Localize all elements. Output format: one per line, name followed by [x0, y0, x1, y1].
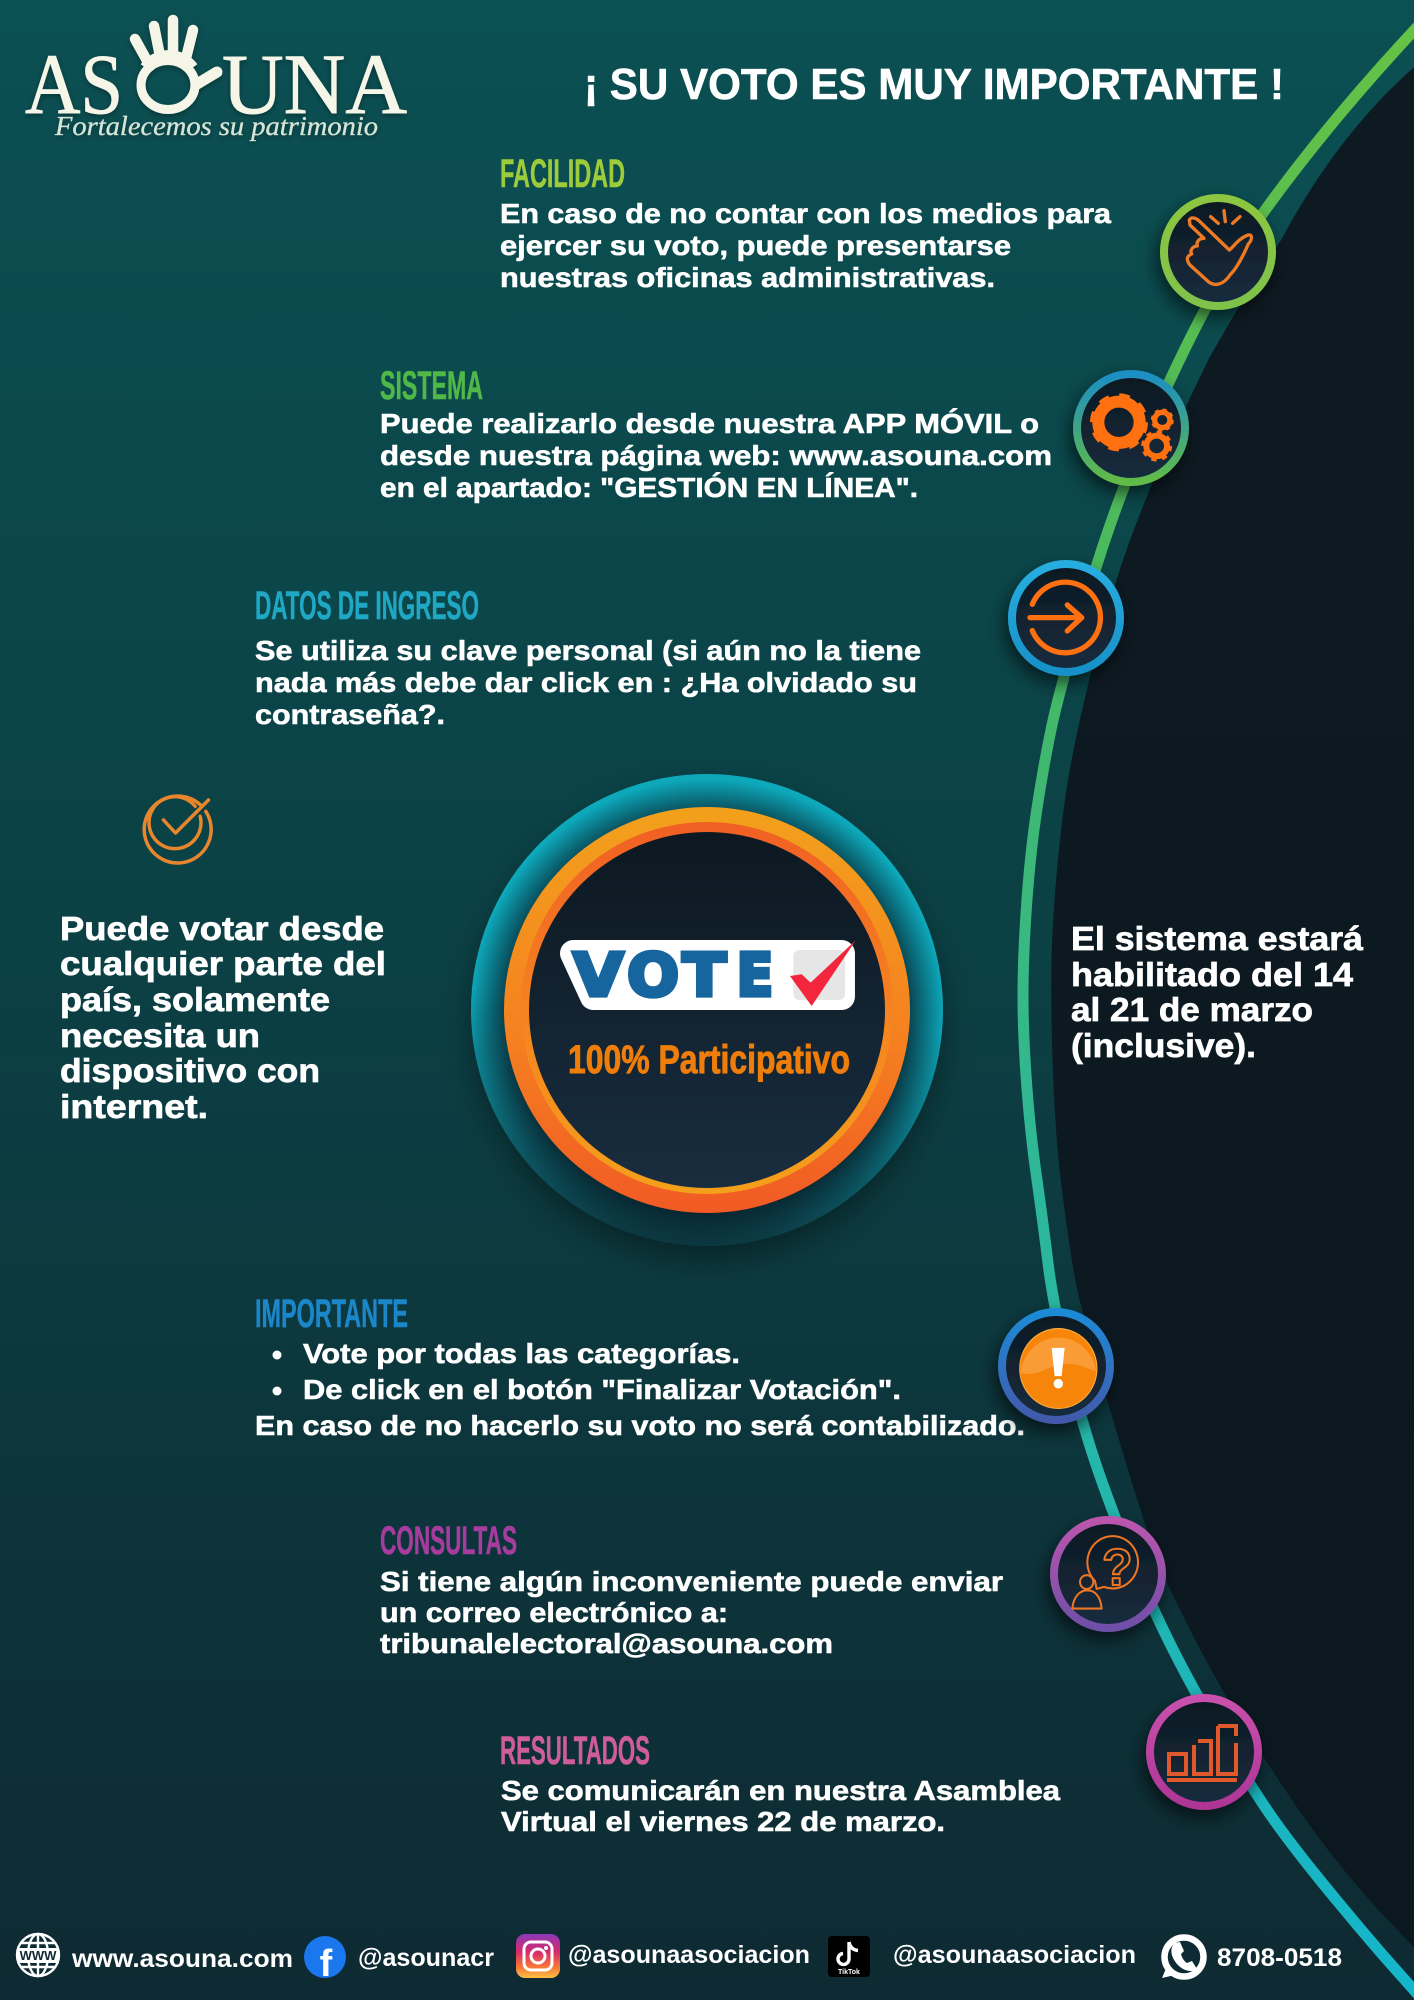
vote logo: E [737, 941, 773, 1009]
footer: contact bar: @asounaasociacion [893, 1941, 1136, 1969]
text block: importante: De click en el botón "Finalizar Votación". [303, 1374, 901, 1405]
logo: ASOUNA: UNA [222, 36, 407, 132]
text block: votar desde cualquier parte: Puede votar desde [60, 910, 384, 947]
vote logo: V [573, 941, 624, 1009]
text block: fechas del sistema: al 21 de marzo [1071, 991, 1313, 1028]
text block: facilidad: ejercer su voto, puede presentarse [500, 230, 1011, 261]
text block: importante: IMPORTANTE [255, 1292, 408, 1336]
vote logo: O [627, 941, 679, 1009]
text block: datos de ingreso: nada más debe dar click en : ¿Ha olvidado su [255, 667, 917, 698]
badge subtitle: 100% Participativo [568, 1038, 850, 1082]
text block: facilidad: nuestras oficinas administrativas. [500, 262, 995, 293]
logo: ASOUNA: Fortalecemos su patrimonio [54, 111, 378, 141]
text block: resultados: RESULTADOS [500, 1729, 650, 1773]
text block: consultas: un correo electrónico a: [380, 1597, 728, 1628]
icon: web globe: WWW [20, 1948, 57, 1963]
text block: votar desde cualquier parte: internet. [60, 1088, 208, 1125]
icon: facebook [304, 1936, 346, 1985]
vote logo: T [683, 941, 726, 1009]
text block: votar desde cualquier parte: dispositivo con [60, 1052, 320, 1089]
central vote badge [467, 774, 947, 1256]
icon: bar chart [1150, 1698, 1258, 1806]
icon: question person: ? [1102, 1538, 1133, 1596]
text block: datos de ingreso [255, 584, 921, 730]
text block: datos de ingreso: Se utiliza su clave personal (si aún no la tiene [255, 635, 921, 666]
icon: facebook: f [320, 1943, 333, 1985]
text block: votar desde cualquier parte: cualquier parte del [60, 945, 386, 982]
text block: sistema: desde nuestra página web: www.asouna.com [380, 440, 1052, 471]
text block: resultados: Virtual el viernes 22 de marzo. [501, 1806, 945, 1837]
icon: gears [1077, 374, 1185, 482]
text block: votar desde cualquier parte: necesita un [60, 1017, 260, 1054]
text block: sistema: SISTEMA [380, 364, 483, 408]
text block: consultas: tribunalelectoral@asouna.com [380, 1628, 833, 1659]
text block: consultas [380, 1519, 1003, 1659]
logo: ASOUNA [25, 20, 407, 141]
text block: importante: En caso de no hacerlo su voto no será contabilizado. [255, 1410, 1025, 1441]
icon: tiktok: TikTok [838, 1969, 860, 1976]
text block: fechas del sistema: El sistema estará [1071, 920, 1364, 957]
text block: sistema [380, 364, 1052, 503]
logo: ASOUNA: AS [25, 36, 123, 132]
text block: votar desde cualquier parte [60, 910, 386, 1125]
text block: fechas del sistema: habilitado del 14 [1071, 956, 1354, 993]
footer: contact bar [17, 1934, 1342, 1985]
footer: contact bar: 8708-0518 [1217, 1944, 1342, 1972]
text block: fechas del sistema: (inclusive). [1071, 1027, 1256, 1064]
text block: sistema: en el apartado: "GESTIÓN EN LÍNEA". [380, 472, 918, 503]
title: ¡ SU VOTO ES MUY IMPORTANTE ! [584, 60, 1284, 109]
icon: whatsapp [1162, 1938, 1204, 1978]
icon: web globe [17, 1934, 59, 1976]
dark right panel [1051, 62, 1414, 1954]
text block: datos de ingreso: contraseña?. [255, 699, 445, 730]
vote logo [573, 940, 856, 1009]
text block: importante: Vote por todas las categorías. [303, 1338, 740, 1369]
footer: contact bar: www.asouna.com [71, 1945, 293, 1973]
text block: importante [255, 1292, 1025, 1441]
text block: facilidad: FACILIDAD [500, 152, 625, 196]
text block: datos de ingreso: DATOS DE INGRESO [255, 584, 479, 628]
text block: facilidad: En caso de no contar con los medios para [500, 198, 1111, 229]
text block: resultados [500, 1729, 1060, 1837]
text block: consultas: Si tiene algún inconveniente puede enviar [380, 1566, 1003, 1597]
footer: contact bar: @asounacr [358, 1944, 494, 1972]
icon: instagram [516, 1934, 560, 1978]
icon: snapping hand [1164, 198, 1272, 306]
icon: warning [1002, 1312, 1110, 1420]
icon: question person [1054, 1520, 1162, 1628]
text block: fechas del sistema [1071, 920, 1364, 1064]
text block: sistema: Puede realizarlo desde nuestra APP MÓVIL o [380, 408, 1039, 439]
footer: contact bar: @asounaasociacion [568, 1941, 810, 1969]
curved timeline line [1023, 24, 1414, 1997]
icon: tiktok [828, 1936, 870, 1977]
text block: consultas: CONSULTAS [380, 1519, 517, 1563]
icon: login arrow [1012, 564, 1120, 672]
text block: facilidad [500, 152, 1111, 293]
icon: check target [144, 796, 211, 863]
text block: votar desde cualquier parte: país, solamente [60, 981, 330, 1018]
text block: resultados: Se comunicarán en nuestra Asamblea [501, 1775, 1060, 1806]
